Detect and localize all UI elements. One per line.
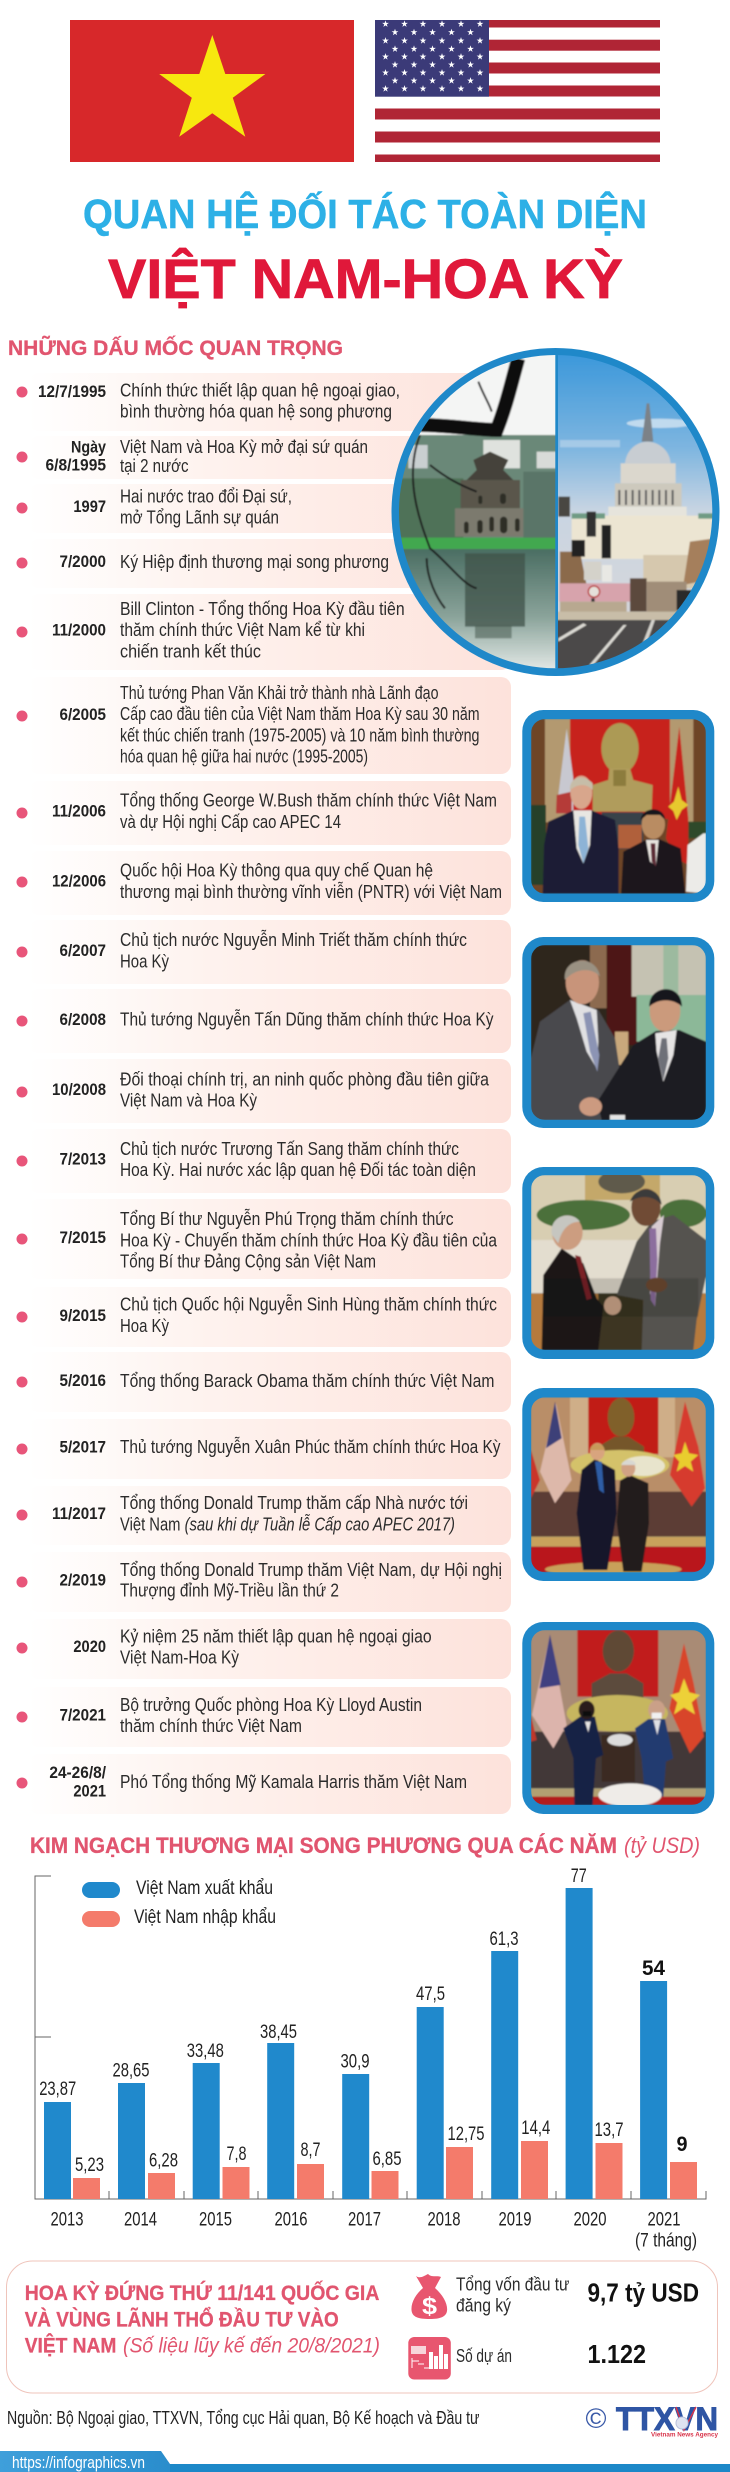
investment headline: VÀ VÙNG LÃNH THỔ ĐẦU TƯ VÀO [25, 2308, 339, 2332]
logo: TTXVN: © [586, 2403, 607, 2434]
import values: 14,4 [521, 2118, 551, 2139]
row: 6/8/1995: 6/8/1995 [46, 456, 106, 475]
export values: 47,5 [416, 1984, 445, 2005]
row: 6/8/1995: Việt Nam và Hoa Kỳ mở đại sứ quán [120, 436, 368, 457]
row: 10/2008 [16, 1059, 511, 1123]
total capital value: 9,7 tỷ USD [588, 2278, 699, 2308]
total capital label: đăng ký [456, 2295, 512, 2316]
row: 2020: 2020 [73, 1637, 106, 1656]
year labels: 2014 [124, 2210, 157, 2231]
export values: 33,48 [187, 2041, 224, 2062]
export values: 77 [571, 1866, 587, 1887]
row: 12/7/1995: bình thường hóa quan hệ song phương [120, 401, 392, 422]
panel: timeline [16, 373, 511, 1814]
row: 9/2015: 9/2015 [60, 1306, 106, 1325]
investment headline: HOA KỲ ĐỨNG THỨ 11/141 QUỐC GIA [25, 2281, 379, 2305]
row: 2/2019 [16, 1552, 511, 1612]
row: 7/2000: Ký Hiệp định thương mại song phương [120, 551, 389, 572]
export values: 23,87 [39, 2079, 76, 2100]
projects label: Số dự án [456, 2345, 512, 2366]
row: 6/2007 [16, 920, 511, 984]
year labels: 2015 [199, 2210, 232, 2231]
photo: George W. Bush and Nguyen Tan Dung [522, 937, 714, 1128]
row: 12/2006: thương mại bình thường vĩnh viễn (PNTR) với Việt Nam [120, 881, 502, 902]
total capital label: Tổng vốn đầu tư [456, 2274, 569, 2295]
investment headline [25, 2281, 380, 2358]
row: 6/2008: Thủ tướng Nguyễn Tấn Dũng thăm chính thức Hoa Kỳ [120, 1009, 494, 1030]
row: 7/2015: Tổng Bí thư Nguyễn Phú Trọng thăm chính thức [120, 1208, 454, 1229]
bar chart [35, 1866, 706, 2252]
row: 6/8/1995: Ngày [71, 438, 106, 457]
row: 11/2017 [16, 1486, 511, 1545]
row: 24-26/8/2021: 24-26/8/ [49, 1763, 106, 1782]
row: 12/7/1995: 12/7/1995 [38, 382, 106, 401]
row: 11/2017: 11/2017 [52, 1504, 106, 1523]
row: 24-26/8/2021 [16, 1754, 511, 1814]
row: 9/2015: Hoa Kỳ [120, 1315, 170, 1336]
row: 12/7/1995: Chính thức thiết lập quan hệ ngoại giao, [120, 380, 400, 401]
import values: 9 [676, 2133, 688, 2156]
row: 6/2005: hóa quan hệ giữa hai nước (1995-2005) [120, 746, 368, 767]
row: 7/2015 [16, 1199, 511, 1279]
row: 2020: Kỷ niệm 25 năm thiết lập quan hệ ngoại giao [120, 1626, 432, 1647]
row: 5/2017: Thủ tướng Nguyễn Xuân Phúc thăm chính thức Hoa Kỳ [120, 1436, 501, 1457]
row: 7/2015: 7/2015 [60, 1228, 106, 1247]
import values: 5,23 [75, 2155, 104, 2176]
photo: Hoan Kiem lake and US Capitol circle [392, 348, 720, 676]
export values: 54 [642, 1957, 665, 1980]
import values: 13,7 [594, 2120, 624, 2141]
row: 7/2000 [16, 539, 511, 588]
legend: Việt Nam nhập khẩu [134, 1907, 276, 1928]
row: 2/2019: Thượng đỉnh Mỹ-Triều lần thứ 2 [120, 1580, 339, 1601]
row: 11/2000: 11/2000 [52, 621, 106, 640]
row: 7/2015: Hoa Kỳ - Chuyến thăm chính thức Hoa Kỳ đầu tiên của [120, 1230, 498, 1251]
projects value: 1.122 [588, 2339, 646, 2369]
row: 6/8/1995 [16, 436, 511, 479]
row: 6/2007: Chủ tịch nước Nguyễn Minh Triết thăm chính thức [120, 929, 467, 950]
row: 7/2000: 7/2000 [60, 552, 106, 571]
import values [75, 2118, 688, 2176]
row: 2/2019: Tổng thống Donald Trump thăm Việt Nam, dự Hội nghị [120, 1559, 502, 1580]
row: 24-26/8/2021: 2021 [73, 1782, 106, 1801]
heading: trade turnover: KIM NGẠCH THƯƠNG MẠI SONG PHƯƠNG QUA CÁC NĂM [30, 1833, 617, 1858]
title: VIỆT NAM-HOA KỲ [108, 247, 623, 310]
row: 7/2021: 7/2021 [60, 1706, 106, 1725]
row: 5/2017: 5/2017 [60, 1438, 106, 1457]
row: 2020: Việt Nam-Hoa Kỳ [120, 1647, 240, 1668]
export values: 30,9 [340, 2052, 370, 2073]
row: 11/2006 [16, 781, 511, 845]
icon: money bag [411, 2274, 447, 2320]
flag: Vietnam [70, 20, 354, 162]
row: 12/2006: Quốc hội Hoa Kỳ thông qua quy chế Quan hệ [120, 860, 433, 881]
footer bar [0, 2451, 730, 2472]
heading: milestones: NHỮNG DẤU MỐC QUAN TRỌNG [8, 336, 343, 360]
year labels: (7 tháng) [635, 2231, 697, 2252]
row: 2/2019: 2/2019 [60, 1571, 106, 1590]
export values: 38,45 [260, 2022, 297, 2043]
import values: 7,8 [226, 2144, 246, 2165]
row: 10/2008: Đối thoại chính trị, an ninh quốc phòng đầu tiên giữa [120, 1069, 490, 1090]
row: 1997: Hai nước trao đổi Đại sứ, [120, 486, 292, 507]
row: 11/2017: Việt Nam (sau khi dự Tuần lễ Cấp cao APEC 2017) [120, 1514, 455, 1535]
logo: TTXVN: Vietnam News Agency [651, 2432, 718, 2438]
investment headline: (Số liệu lũy kế đến 20/8/2021) [123, 2335, 380, 2358]
row: 6/2005: 6/2005 [60, 705, 106, 724]
total capital label [456, 2274, 569, 2316]
row: 7/2021: Bộ trưởng Quốc phòng Hoa Kỳ Lloyd Austin [120, 1694, 422, 1715]
row: 11/2000 [16, 594, 511, 670]
row: 2020 [16, 1619, 511, 1679]
row: 10/2008: 10/2008 [52, 1080, 106, 1099]
row: 11/2017: Tổng thống Donald Trump thăm cấp Nhà nước tới [120, 1492, 468, 1513]
title [83, 191, 647, 310]
year labels [50, 2210, 697, 2252]
export bars [44, 1888, 667, 2199]
row: 12/2006 [16, 851, 511, 915]
legend: Việt Nam xuất khẩu [136, 1878, 273, 1899]
chart axes [35, 1876, 706, 2199]
row: 11/2000: chiến tranh kết thúc [120, 641, 261, 662]
photo: Kamala Harris and Nguyen Xuan Phuc [522, 1622, 714, 1814]
row: 12/2006: 12/2006 [52, 872, 106, 891]
row: 7/2013: 7/2013 [60, 1150, 106, 1169]
row: 10/2008: Việt Nam và Hoa Kỳ [120, 1090, 258, 1111]
year labels: 2021 [648, 2210, 680, 2231]
row: 24-26/8/2021: Phó Tổng thống Mỹ Kamala Harris thăm Việt Nam [120, 1771, 467, 1792]
row: 6/2005: Cấp cao đầu tiên của Việt Nam thăm Hoa Kỳ sau 30 năm [120, 703, 480, 724]
photo: Donald Trump and Nguyen Phu Trong [522, 1388, 714, 1581]
export values [39, 1866, 665, 2100]
year labels: 2018 [428, 2210, 460, 2231]
row: 9/2015 [16, 1287, 511, 1347]
logo: TTXVN: TTXVN [616, 2401, 718, 2437]
export values: 61,3 [490, 1929, 518, 1950]
row: 6/2007: 6/2007 [60, 941, 106, 960]
row: 6/2005: kết thúc chiến tranh (1975-2005) và 10 năm bình thường [120, 725, 480, 746]
year labels: 2019 [498, 2210, 532, 2231]
row: 12/7/1995 [16, 373, 511, 431]
flag: United States [375, 20, 660, 162]
row: 11/2000: Bill Clinton - Tổng thống Hoa Kỳ đầu tiên [120, 598, 405, 619]
heading: trade turnover: (tỷ USD) [624, 1833, 700, 1858]
row: 7/2021 [16, 1687, 511, 1747]
row: 11/2006: và dự Hội nghị Cấp cao APEC 14 [120, 811, 341, 832]
photo: Nguyen Phu Trong and Barack Obama [522, 1167, 714, 1359]
row: 7/2021: thăm chính thức Việt Nam [120, 1715, 302, 1736]
row: 5/2016: Tổng thống Barack Obama thăm chính thức Việt Nam [120, 1370, 494, 1391]
icon: money bag: $ [422, 2293, 438, 2320]
row: 7/2013 [16, 1129, 511, 1193]
year labels: 2016 [274, 2210, 308, 2231]
import values: 6,28 [149, 2151, 178, 2172]
import values: 8,7 [300, 2140, 320, 2161]
row: 6/2008 [16, 989, 511, 1053]
row: 6/2005 [16, 677, 511, 774]
row: 1997 [16, 484, 511, 533]
legend [82, 1878, 276, 1928]
row: 7/2013: Chủ tịch nước Trương Tấn Sang thăm chính thức [120, 1138, 459, 1159]
year labels: 2017 [348, 2210, 381, 2231]
row: 6/8/1995: tại 2 nước [120, 455, 188, 476]
row: 6/2007: Hoa Kỳ [120, 950, 170, 972]
import bars [73, 2141, 697, 2199]
row: 5/2016 [16, 1352, 511, 1412]
row: 11/2006: 11/2006 [52, 802, 106, 821]
row: 1997: mở Tổng Lãnh sự quán [120, 507, 279, 528]
year labels: 2013 [50, 2210, 84, 2231]
icon: project chart [408, 2337, 451, 2380]
row: 11/2000: thăm chính thức Việt Nam kể từ khi [120, 619, 365, 640]
row: 1997: 1997 [73, 497, 106, 516]
photo: Bill Clinton visit [522, 710, 714, 902]
import values: 12,75 [448, 2124, 484, 2145]
row: 11/2006: Tổng thống George W.Bush thăm chính thức Việt Nam [120, 790, 497, 811]
row: 6/2008: 6/2008 [60, 1010, 106, 1029]
investment headline: VIỆT NAM [25, 2334, 116, 2358]
export values: 28,65 [112, 2061, 150, 2082]
footer bar: https://infographics.vn [12, 2453, 145, 2472]
row: 5/2016: 5/2016 [60, 1371, 106, 1390]
row: 7/2015: Tổng Bí thư Đảng Cộng sản Việt Nam [120, 1251, 376, 1272]
row: 9/2015: Chủ tịch Quốc hội Nguyễn Sinh Hùng thăm chính thức [120, 1294, 497, 1315]
row: 6/2005: Thủ tướng Phan Văn Khải trở thành nhà Lãnh đạo [120, 682, 438, 703]
title: QUAN HỆ ĐỐI TÁC TOÀN DIỆN [83, 191, 647, 237]
import values: 6,85 [372, 2149, 402, 2170]
row: 7/2013: Hoa Kỳ. Hai nước xác lập quan hệ Đối tác toàn diện [120, 1159, 476, 1180]
panel: investment [6, 2261, 718, 2393]
row: 5/2017 [16, 1419, 511, 1479]
year labels: 2020 [574, 2210, 606, 2231]
source note: Nguồn: Bộ Ngoại giao, TTXVN, Tổng cục Hải quan, Bộ Kế hoạch và Đầu tư [7, 2407, 479, 2428]
